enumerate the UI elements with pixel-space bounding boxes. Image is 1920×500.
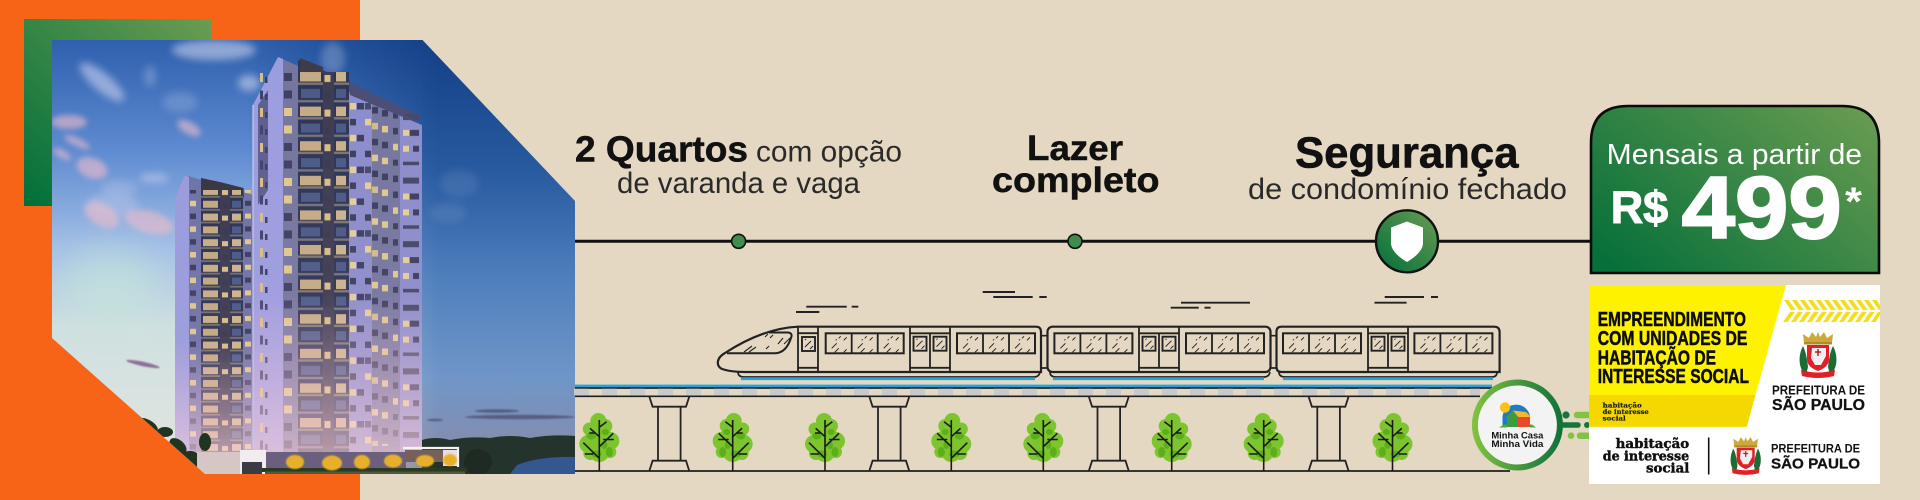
yellow notice: HABITAÇÃO DE	[1598, 346, 1716, 369]
text: 2 quartos: com opção	[756, 136, 902, 168]
yellow notice	[1589, 285, 1786, 427]
text: 2 quartos: de varanda e vaga	[617, 167, 860, 200]
train	[718, 292, 1500, 379]
clouds	[51, 40, 575, 421]
yellow notice: INTERESSE SOCIAL	[1598, 365, 1749, 388]
text: prefeitura small: SÃO PAULO	[1771, 454, 1860, 472]
train car 3	[1276, 327, 1500, 379]
pillars	[649, 396, 1349, 471]
text: lazer completo: Lazer	[1027, 129, 1123, 168]
divider	[1708, 438, 1710, 474]
panel: price: 499	[1682, 158, 1842, 257]
text: habitacao de interesse social: social	[1646, 462, 1689, 477]
badge: Minha Casa Minha Vida: Minha Vida	[1491, 439, 1544, 450]
chevron pattern	[1783, 300, 1880, 322]
panel: price: *	[1845, 180, 1862, 224]
yellow notice: social	[1603, 414, 1626, 422]
timeline dot: quartos	[732, 234, 746, 248]
text: seguranca	[1248, 128, 1567, 206]
coat of arms small	[1731, 437, 1761, 475]
text: seguranca: Segurança	[1295, 128, 1519, 178]
text: prefeitura large	[1772, 384, 1865, 414]
photo: residential towers at dusk	[51, 40, 575, 475]
badge: Minha Casa Minha Vida	[1472, 380, 1563, 470]
sky	[52, 40, 575, 474]
timeline line	[575, 240, 1592, 243]
train car 2	[1048, 327, 1270, 379]
panel: price	[1591, 106, 1879, 273]
panel: social housing card	[1589, 285, 1880, 484]
podium and gardens	[197, 448, 467, 474]
train coupler 2	[1270, 336, 1276, 368]
small back tower	[175, 175, 253, 452]
coat of arms large	[1800, 332, 1836, 378]
yellow notice: EMPREENDIMENTO	[1598, 308, 1746, 331]
text: 2 quartos	[575, 128, 902, 200]
text: lazer completo: completo	[992, 161, 1160, 200]
icon: security shield	[1376, 210, 1438, 272]
badge: Minha Casa Minha Vida: Minha Casa	[1491, 430, 1544, 442]
text: habitacao de interesse social: de interesse	[1603, 449, 1689, 464]
train car 1 with nose	[718, 327, 1041, 379]
text: habitacao de interesse social	[1603, 437, 1690, 477]
yellow notice: habitação	[1603, 402, 1642, 410]
text: 2 quartos: 2 Quartos	[575, 128, 748, 170]
text: lazer completo	[992, 129, 1160, 200]
text: prefeitura large: SÃO PAULO	[1772, 396, 1865, 414]
trees	[579, 413, 1412, 471]
yellow notice: de interesse	[1603, 408, 1649, 416]
train coupler 1	[1042, 336, 1048, 368]
panel: price: Mensais a partir de	[1607, 139, 1862, 171]
panel: price: R$	[1611, 182, 1668, 233]
panel: orange block	[0, 0, 360, 500]
train viaduct track	[574, 386, 1510, 471]
text: prefeitura small: PREFEITURA DE	[1771, 442, 1860, 456]
timeline dot: lazer	[1068, 234, 1082, 248]
text: prefeitura small	[1771, 442, 1860, 472]
green accent square	[24, 19, 211, 206]
distant tree line	[136, 415, 575, 475]
text: habitacao de interesse social: habitação	[1616, 437, 1690, 452]
main front tower	[253, 57, 422, 452]
yellow notice: COM UNIDADES DE	[1598, 327, 1747, 350]
text: prefeitura large: PREFEITURA DE	[1772, 384, 1865, 398]
text: seguranca: de condomínio fechado	[1248, 173, 1567, 206]
speed lines	[796, 292, 1438, 312]
connector: badge to card	[1560, 411, 1590, 439]
